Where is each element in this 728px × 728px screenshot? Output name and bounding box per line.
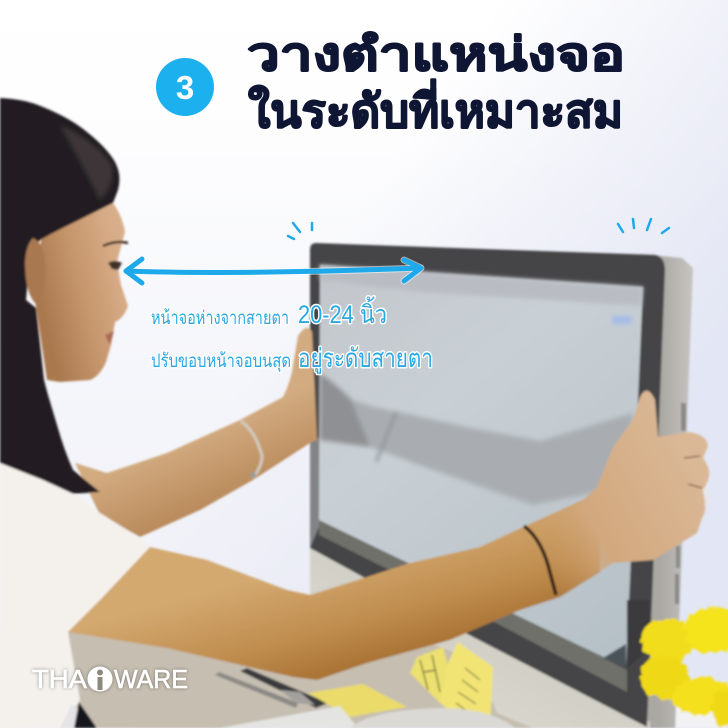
Thaiware logo: THA bbox=[32, 664, 88, 694]
annotation text: หน้าจอห่างจากสายตา bbox=[151, 308, 289, 329]
near hand bbox=[520, 391, 709, 606]
title: ในระดับที่เหมาะสม bbox=[248, 79, 623, 137]
bottom right white surface bbox=[676, 705, 728, 728]
hair highlight bbox=[60, 125, 112, 200]
flat sticky note bbox=[308, 684, 407, 717]
near arm bbox=[68, 492, 600, 680]
browser top bar on screen bbox=[320, 265, 643, 324]
bezel dark corner bbox=[603, 644, 626, 668]
wristband bbox=[524, 526, 556, 595]
yellow flowers bbox=[639, 607, 728, 726]
monitor base on desk bbox=[350, 708, 515, 728]
monitor screen bbox=[319, 265, 643, 668]
checklist sticky note bbox=[440, 642, 493, 728]
ear bbox=[25, 238, 45, 305]
annotation text: ปรับขอบหน้าจอบนสุด bbox=[151, 351, 291, 373]
emphasis ticks right bbox=[618, 219, 669, 233]
keyboard bbox=[220, 706, 358, 728]
Thaiware logo bbox=[32, 664, 188, 694]
far arm bbox=[75, 328, 317, 537]
hair bbox=[0, 98, 119, 494]
monitor side ports bbox=[675, 403, 686, 604]
finger gaps bbox=[684, 456, 702, 488]
title bbox=[247, 28, 625, 137]
eyebrow bbox=[103, 242, 128, 246]
black object on desk bbox=[60, 702, 98, 728]
doodle sticky note bbox=[410, 647, 450, 703]
annotation text bbox=[151, 296, 433, 374]
emphasis ticks left bbox=[288, 223, 312, 239]
distance arrow bbox=[126, 259, 421, 283]
Thaiware logo: WARE bbox=[114, 664, 188, 694]
silver bracelet bbox=[241, 421, 262, 478]
face bbox=[35, 200, 128, 382]
annotation text: อยู่ระดับสายตา bbox=[298, 343, 433, 374]
step number badge: 3 bbox=[176, 69, 194, 106]
eye bbox=[108, 261, 122, 270]
ring bbox=[704, 488, 708, 506]
monitor black bezel bbox=[310, 243, 665, 727]
arm reflection on screen bbox=[320, 373, 633, 505]
left bezel lower grey strip bbox=[310, 438, 321, 548]
lips bbox=[105, 331, 114, 345]
pens bbox=[215, 668, 328, 708]
monitor silver side bbox=[640, 254, 693, 728]
annotation text: 20-24 นิ้ว bbox=[298, 296, 387, 329]
shirt bbox=[0, 463, 150, 728]
title: วางตำแหน่งจอ bbox=[247, 28, 625, 80]
chin reflection strip bbox=[319, 520, 627, 692]
step number badge bbox=[156, 58, 214, 116]
desk surface bbox=[60, 628, 535, 728]
monitor silver chin bbox=[310, 545, 650, 728]
